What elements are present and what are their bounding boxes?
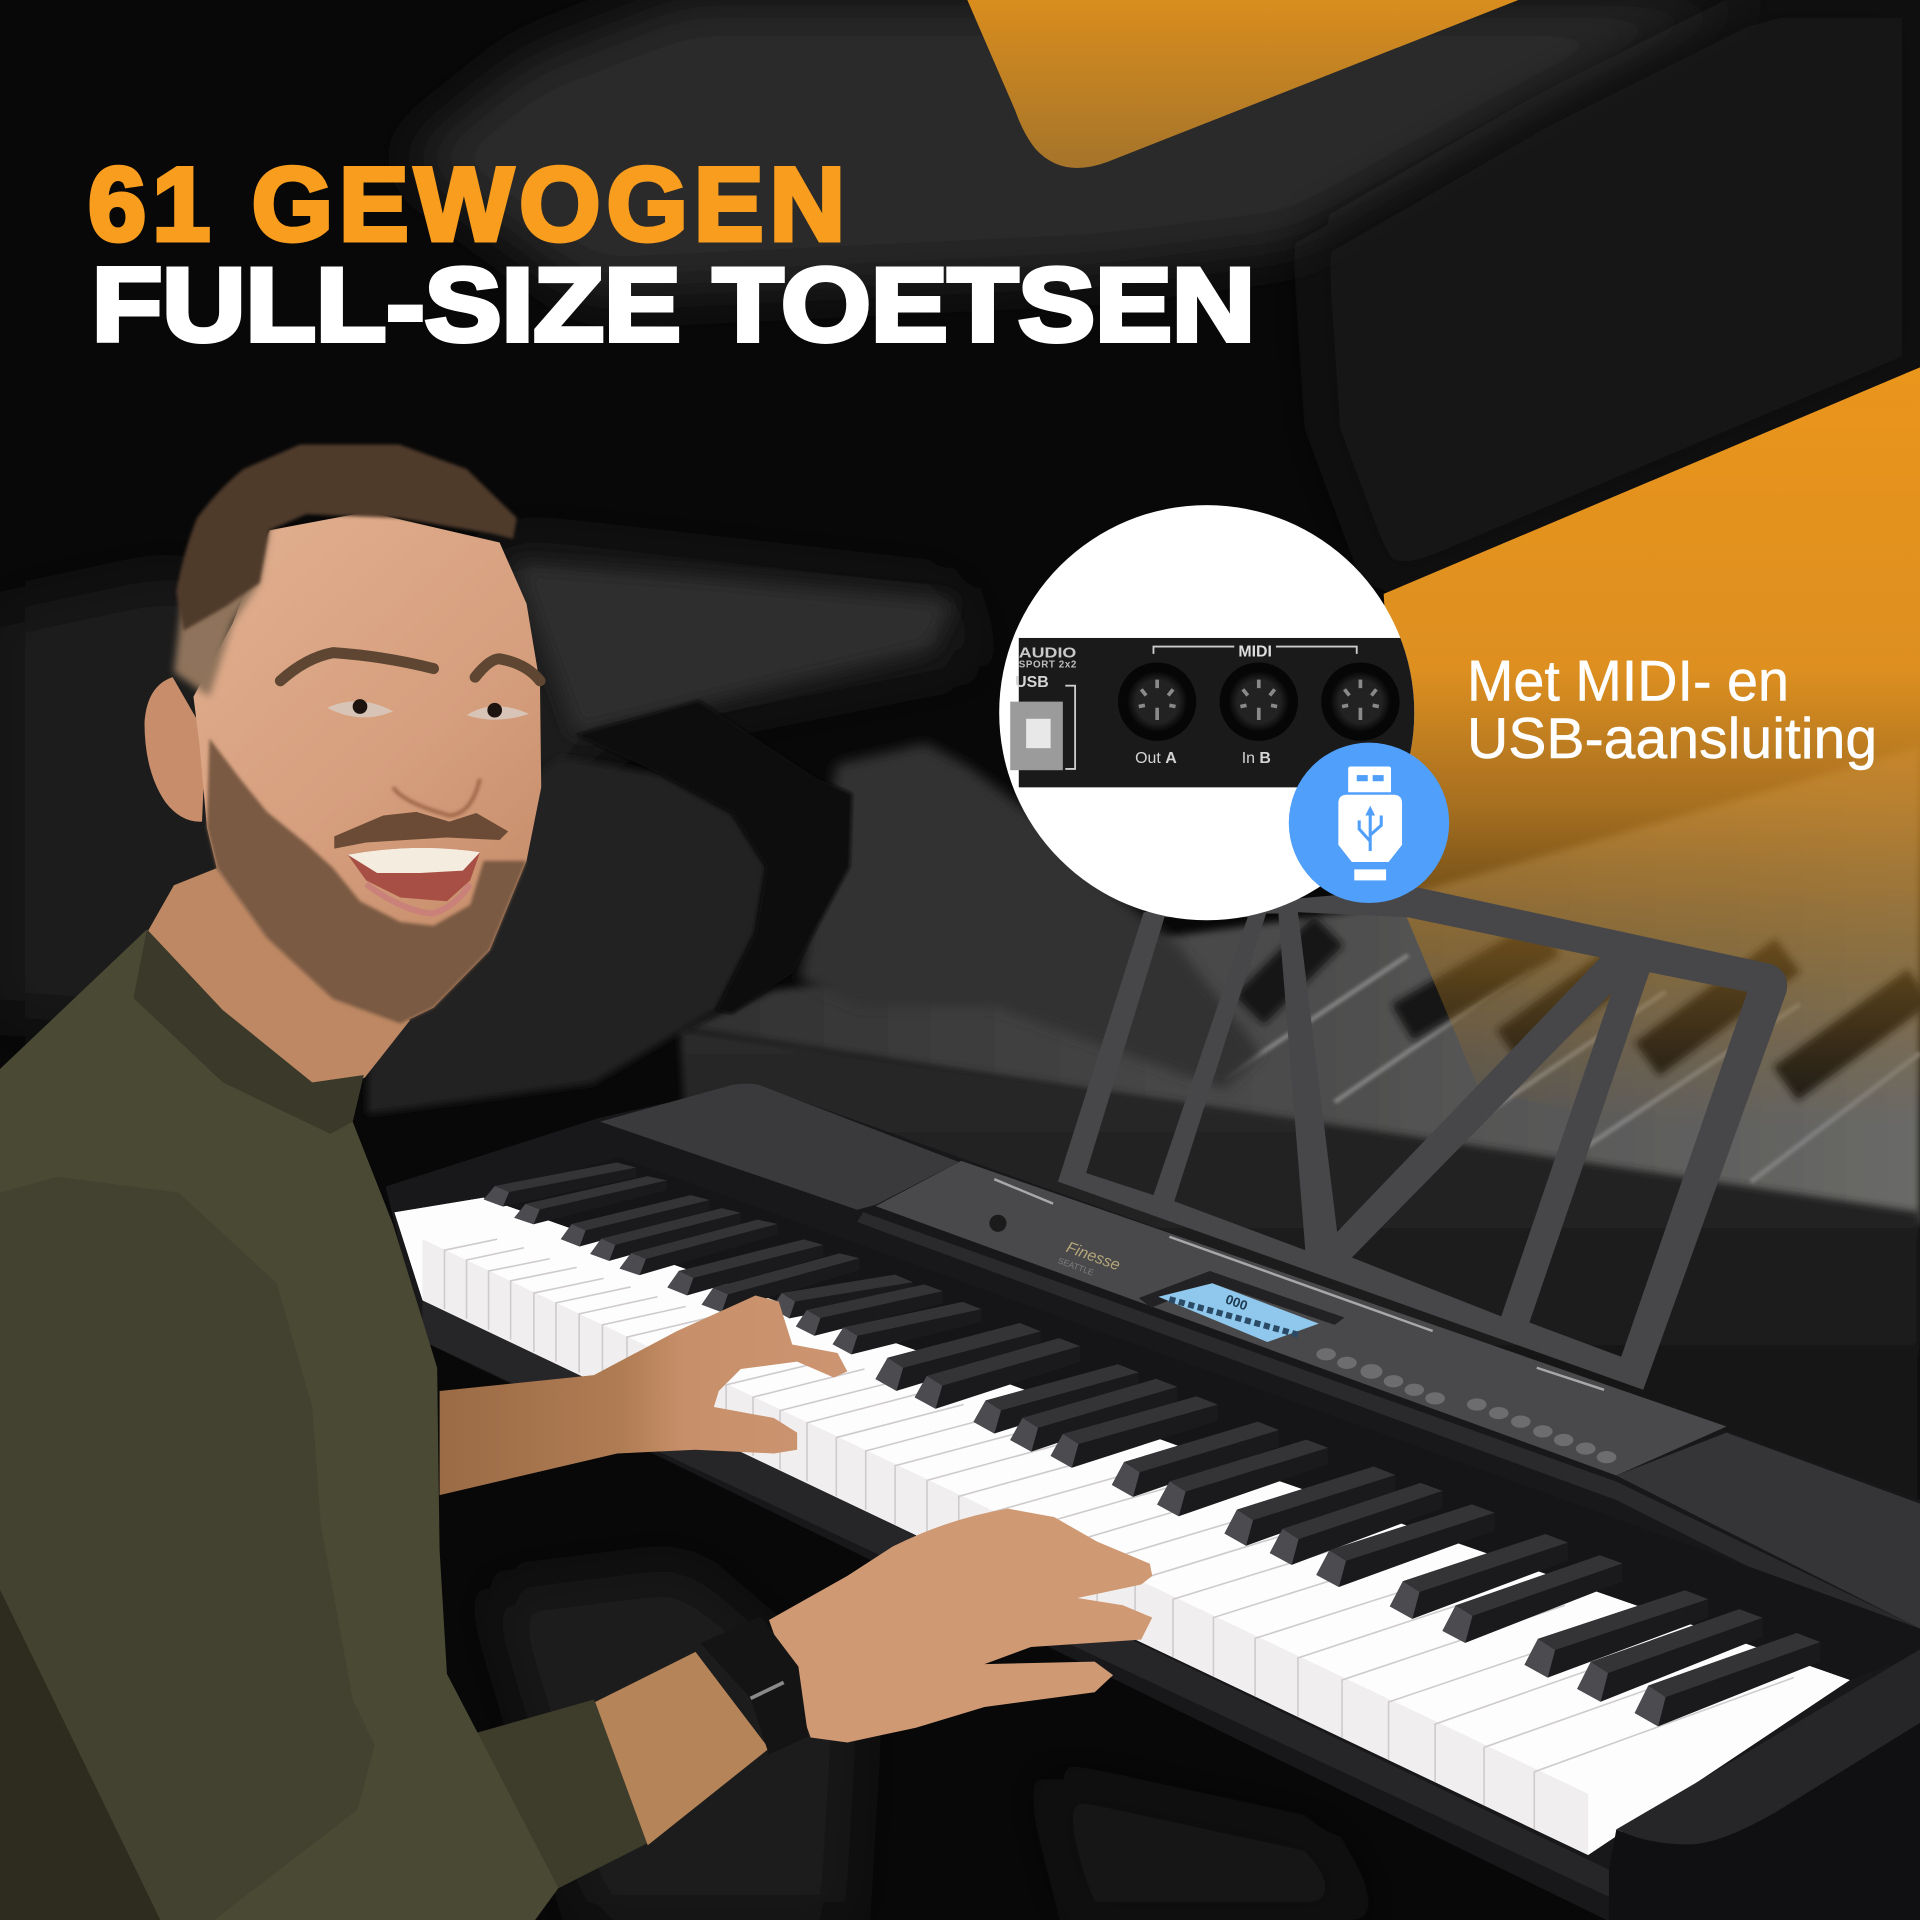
moustache <box>334 812 508 849</box>
icon: USB stick badge <box>1289 743 1449 903</box>
lens circle <box>999 505 1414 920</box>
port panel photo: AUDIO <box>1019 646 1076 662</box>
lower forearm <box>595 1652 769 1845</box>
nose <box>393 779 480 816</box>
dotted grille strip <box>857 1212 1920 1653</box>
speaker grille left <box>600 1084 959 1210</box>
sweater lower torso shadow <box>0 1589 160 1920</box>
collar <box>133 929 364 1134</box>
beard <box>207 738 527 1024</box>
upper hand and forearm <box>440 1296 847 1495</box>
eyes <box>327 699 529 720</box>
face <box>193 512 541 1024</box>
lower hand <box>769 1509 1152 1742</box>
brand mark: SEATTLE <box>1057 1255 1095 1278</box>
sleeve <box>0 1177 375 1920</box>
port panel photo: SPORT 2x2 <box>1019 659 1077 670</box>
hair fade <box>174 530 269 697</box>
mouth <box>348 848 480 913</box>
callout text: Met MIDI- en <box>1467 649 1789 713</box>
port panel photo: USB <box>1015 674 1049 691</box>
ear <box>144 677 206 822</box>
port panel photo <box>1010 638 1423 787</box>
zoom lens: MIDI and USB ports <box>999 505 1423 920</box>
brand mark <box>1057 1238 1122 1285</box>
callout text: USB-aansluiting <box>1467 707 1877 771</box>
neck <box>148 868 410 1093</box>
hair <box>176 444 517 631</box>
lower front rail <box>422 1298 1609 1897</box>
sweater <box>0 929 648 1920</box>
brand mark: Finesse <box>1064 1239 1122 1274</box>
black keys <box>484 1155 1820 1736</box>
panel buttons <box>1316 1348 1616 1463</box>
title line 2: FULL-SIZE TOETSEN <box>92 247 1255 363</box>
eyebrows <box>280 653 540 681</box>
man <box>0 444 1152 1920</box>
callout text <box>1467 649 1877 771</box>
title <box>88 147 1255 363</box>
port panel photo: Out A <box>1135 750 1177 767</box>
keyboard <box>386 1084 1920 1920</box>
cuff <box>478 1700 648 1888</box>
white keys <box>394 1198 1850 1855</box>
smart watch <box>700 1616 808 1755</box>
orange accent shape, right <box>1384 367 1920 1188</box>
music stand <box>1058 888 1787 1390</box>
chrome rails <box>994 1179 1604 1390</box>
port panel photo: In B <box>1242 750 1271 767</box>
LCD display <box>1158 1283 1319 1342</box>
key-bed shadow behind black keys <box>484 1157 1920 1680</box>
port panel photo: MIDI <box>1238 643 1272 660</box>
LCD display: 000 <box>1223 1292 1250 1313</box>
right end cheek <box>1609 1649 1920 1920</box>
control panel <box>876 1161 1727 1476</box>
display recess <box>1139 1271 1344 1325</box>
speaker grille right <box>1616 1433 1920 1629</box>
title line 1: 61 GEWOGEN <box>88 147 845 263</box>
orange accent shape, top <box>967 0 1518 168</box>
keyboard body <box>386 1084 1920 1920</box>
power knob <box>989 1215 1007 1232</box>
